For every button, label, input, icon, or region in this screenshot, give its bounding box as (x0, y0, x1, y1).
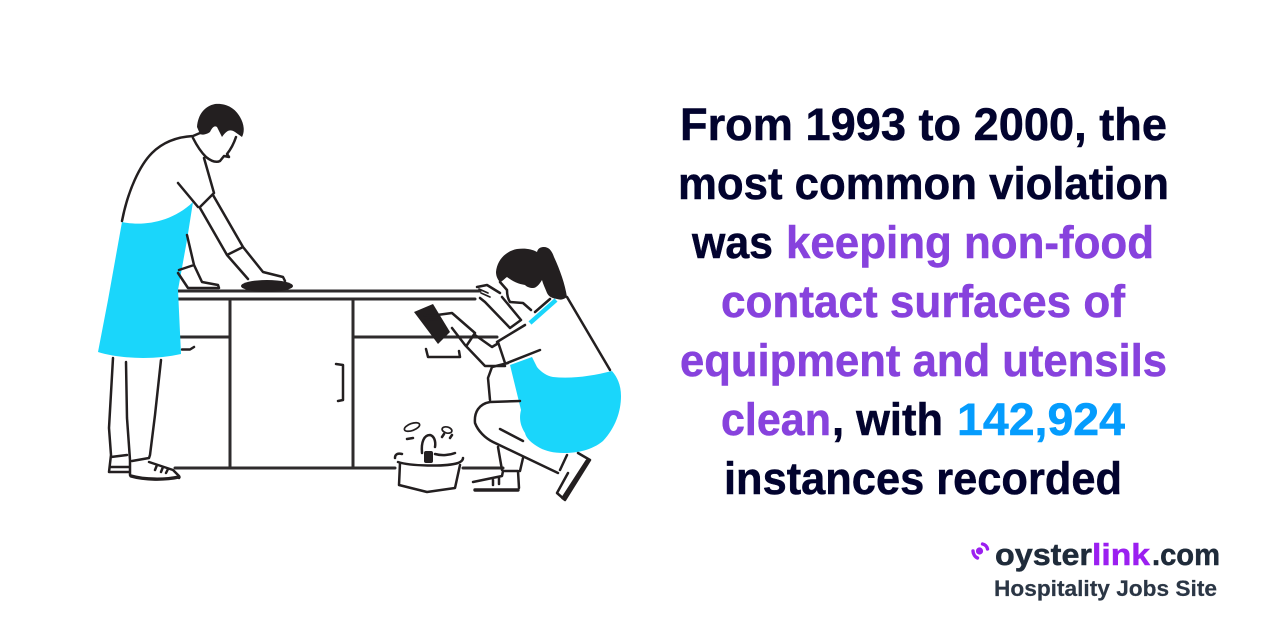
woman apron (510, 357, 621, 453)
man shoe sole (131, 476, 179, 479)
illustration: two workers cleaning a kitchen counter (98, 104, 621, 500)
headline statistic: instances recorded (724, 453, 1122, 504)
cleaning cloth (414, 304, 450, 344)
man legs and shoes (109, 358, 179, 478)
bucket with brush and sponges (395, 421, 463, 492)
headline statistic: contact surfaces of (721, 276, 1126, 327)
headline statistic: most common violation (678, 158, 1169, 209)
headline statistic: keeping non-food (786, 217, 1154, 268)
woman hair (496, 247, 567, 300)
headline statistic: was (691, 217, 773, 268)
headline statistic: clean (721, 394, 831, 445)
headline statistic: From 1993 to 2000, the (680, 99, 1167, 150)
man hair (197, 104, 244, 137)
man wiping the counter (98, 104, 293, 479)
woman apron strap (530, 300, 556, 323)
woman crouching and wiping (414, 247, 621, 500)
headline statistic: equipment and utensils (680, 335, 1167, 386)
man cloth (241, 280, 293, 292)
sponge left (403, 421, 421, 433)
man apron (98, 202, 193, 358)
logo: oysterlink.com: link (1092, 537, 1151, 572)
headline statistic: 142,924 (957, 394, 1126, 445)
logo: oysterlink.com: oyster (995, 537, 1092, 572)
woman shoe soles (475, 461, 587, 498)
logo tagline: Hospitality Jobs Site (994, 576, 1217, 601)
headline statistic: , with (832, 394, 943, 445)
cabinet handles (182, 347, 460, 401)
sponge right (441, 426, 453, 434)
headline statistic (678, 99, 1169, 504)
woman outline (437, 282, 610, 500)
brush handle (424, 451, 433, 463)
logo: oysterlink.com: .com (1152, 537, 1220, 572)
man outline (122, 133, 285, 288)
logo: oysterlink.com (973, 537, 1220, 601)
logo icon (973, 544, 988, 558)
kitchen counter cabinet (175, 291, 503, 468)
